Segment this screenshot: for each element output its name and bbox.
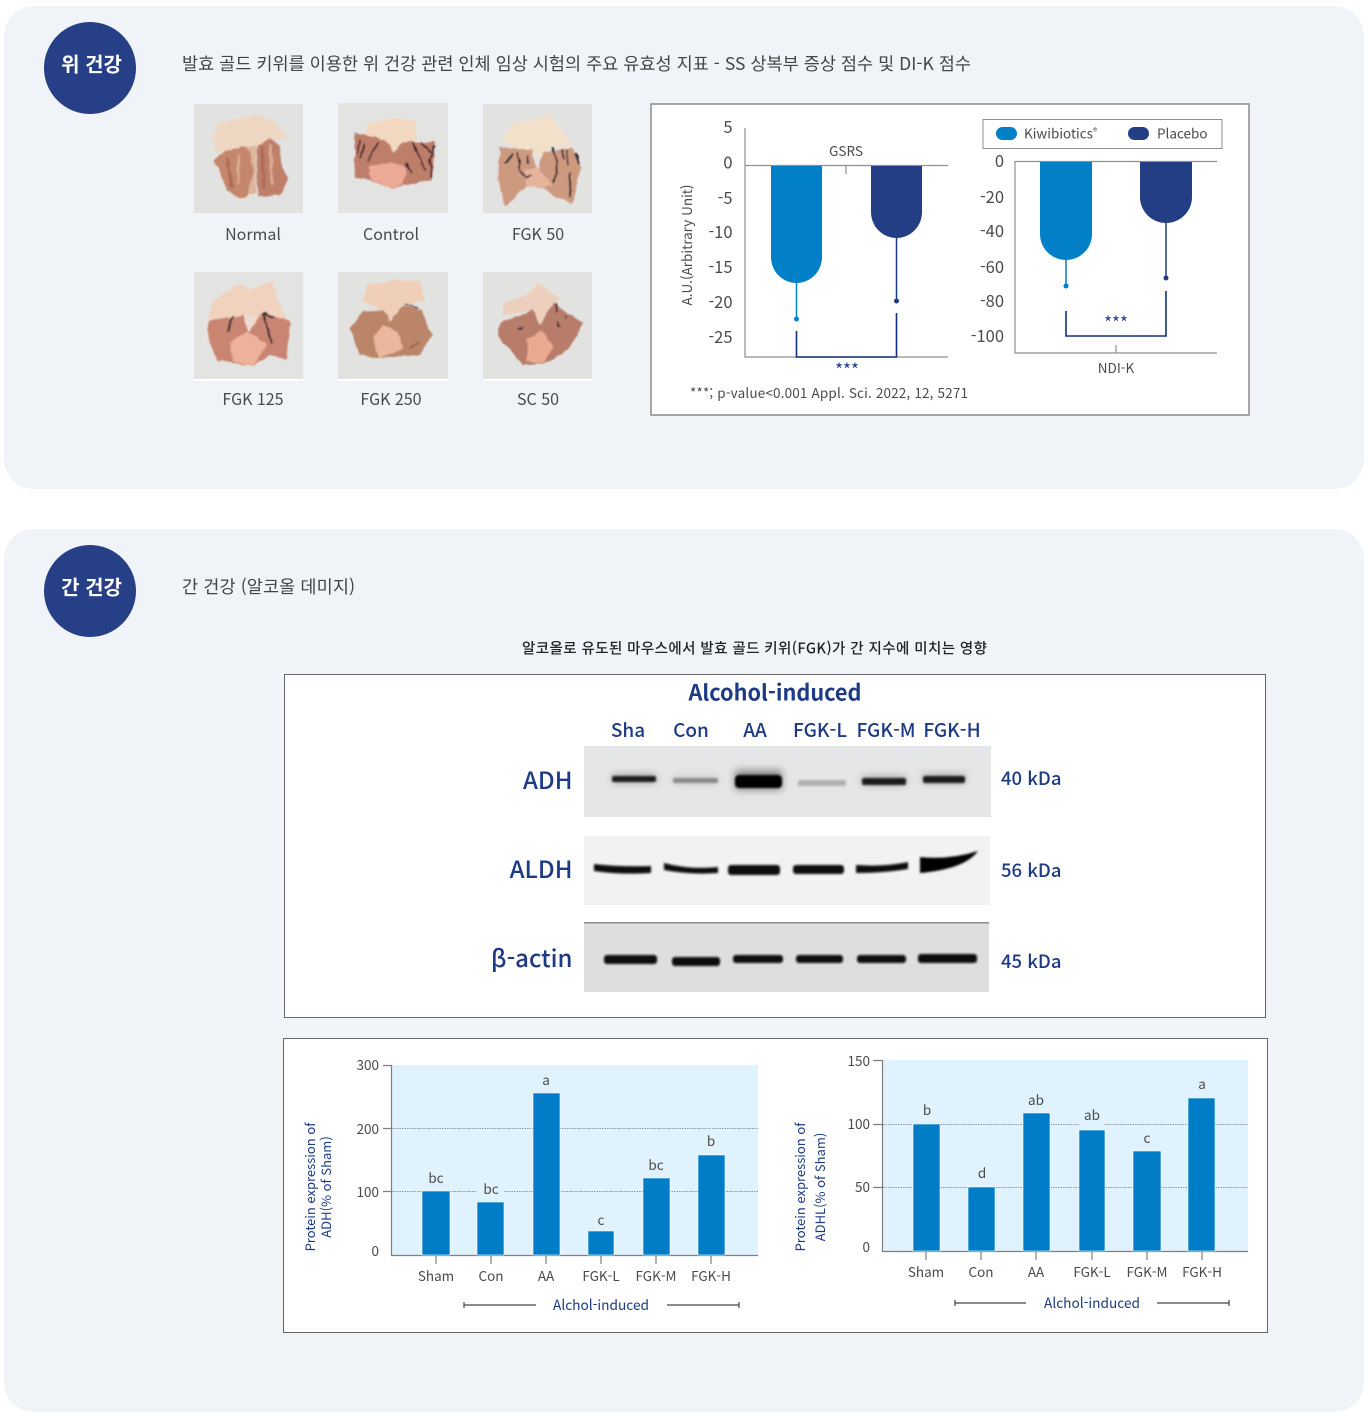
blot row: beta-actin: β-actin <box>491 939 572 974</box>
GSRS y labels: -20 <box>708 289 732 313</box>
ADH y labels: 100 <box>357 1181 379 1201</box>
GSRS y labels: -25 <box>708 324 732 348</box>
ADHL category labels: AA <box>1028 1261 1045 1281</box>
blot row: beta-actin <box>491 922 1061 992</box>
ADHL y labels: 0 <box>862 1236 870 1256</box>
legend: Placebo <box>1157 122 1208 142</box>
GSRS y labels: -15 <box>708 254 732 278</box>
photo: FGK 50 <box>483 104 592 213</box>
photo captions: FGK 125 <box>222 386 284 410</box>
ADHL y labels: 100 <box>848 1113 870 1133</box>
GSRS bar: Placebo <box>871 166 922 304</box>
lane labels: FGK-H <box>923 716 981 743</box>
blot row: ADH: ADH <box>523 761 572 796</box>
ADHL category labels: Con <box>968 1261 994 1281</box>
NDI-K bar: Placebo <box>1140 162 1192 280</box>
ADH group bracket <box>464 1295 739 1315</box>
ADH significance letters: bc <box>483 1178 499 1198</box>
ADHL category labels: FGK-L <box>1073 1261 1111 1281</box>
NDI-K significance bracket: *** <box>1104 309 1128 334</box>
badge: 간 건강: 간 건강 <box>61 572 122 600</box>
ADHL significance letters: ab <box>1084 1104 1100 1124</box>
ADH category labels: Sham <box>418 1265 454 1285</box>
NDI-K y labels: -20 <box>980 184 1004 208</box>
NDI-K title: NDI-K <box>1098 357 1134 377</box>
lane labels: AA <box>743 716 767 743</box>
panel: liver health <box>4 529 1364 1412</box>
ADH category labels: FGK-L <box>582 1265 620 1285</box>
NDI-K bar: Kiwibiotics <box>1040 162 1092 288</box>
legend <box>983 120 1222 148</box>
NDI-K y labels: 0 <box>995 148 1004 172</box>
ADHL category labels <box>908 1261 1222 1281</box>
ADHL y axis title: Protein expression of <box>790 1122 809 1251</box>
NDI-K axis <box>1015 161 1217 353</box>
ADHL significance letters: a <box>1198 1073 1206 1093</box>
blot row: beta-actin: 45 kDa <box>1001 948 1061 974</box>
ADHL category labels: FGK-H <box>1182 1261 1222 1281</box>
GSRS y labels <box>708 114 732 348</box>
lane labels: Con <box>673 716 709 743</box>
GSRS significance bracket <box>796 313 896 381</box>
NDI-K y labels: -60 <box>980 254 1004 278</box>
panel: stomach health <box>4 6 1364 489</box>
GSRS y axis title: A.U.(Arbitrary Unit) <box>676 185 696 305</box>
photo captions <box>222 221 564 410</box>
ADH significance letters: bc <box>648 1154 664 1174</box>
chart: ADHL expression <box>790 1050 1248 1313</box>
chart: ADH expression: ADH(% of Sham) <box>316 1136 335 1238</box>
ADHL grid lines <box>883 1124 1248 1188</box>
photo captions: SC 50 <box>517 386 559 410</box>
ADH significance letters: bc <box>428 1167 444 1187</box>
blot row: ALDH: 56 kDa <box>1001 857 1061 883</box>
ADH category labels <box>418 1265 731 1285</box>
chart panel: GSRS and NDI-K <box>651 104 1249 415</box>
ADHL significance letters: ab <box>1028 1089 1044 1109</box>
photo: FGK 250 <box>338 272 448 381</box>
ADH significance letters: c <box>598 1209 605 1229</box>
blot row: ADH <box>523 746 1061 817</box>
photo: Control <box>338 103 448 213</box>
blot row: ADH: 40 kDa <box>1001 765 1061 791</box>
ADH group bracket: Alchol-induced <box>553 1295 649 1315</box>
ADHL y labels <box>848 1050 870 1256</box>
photo captions: Control <box>363 221 419 245</box>
ADHL group bracket <box>955 1293 1229 1313</box>
heading: stomach clinical trial: 발효 골드 키위를 이용한 위 건강 관련 인체 임상 시험의 주요 유효성 지표 - SS 상복부 증상 점수 및 DI-K 점수 <box>182 51 971 76</box>
bar charts panel <box>284 1038 1268 1332</box>
ADH y labels: 0 <box>372 1240 379 1260</box>
ADHL y labels: 150 <box>848 1050 870 1070</box>
GSRS y labels: 5 <box>723 114 732 138</box>
GSRS y labels: -5 <box>718 185 732 209</box>
photo: Normal <box>194 104 303 213</box>
ADH bars <box>422 1093 725 1255</box>
legend: ® <box>1093 124 1097 138</box>
NDI-K y labels <box>971 148 1004 347</box>
photo: FGK 125 <box>194 272 305 381</box>
photo captions: FGK 250 <box>360 386 422 410</box>
chart: ADH expression <box>300 1054 758 1315</box>
ADHL group bracket: Alchol-induced <box>1044 1293 1140 1313</box>
subheading: FGK effect: 알코올로 유도된 마우스에서 발효 골드 키위(FGK)가 간 지수에 미치는 영향 <box>522 638 987 658</box>
ADH y axis title: Protein expression of <box>300 1122 319 1251</box>
ADH category labels: AA <box>538 1265 555 1285</box>
ADHL significance letters: d <box>978 1162 986 1182</box>
ADHL plot background <box>883 1060 1248 1251</box>
ADHL category labels: FGK-M <box>1126 1261 1168 1281</box>
ADHL significance letters: b <box>923 1099 931 1119</box>
GSRS y labels: 0 <box>723 150 732 174</box>
GSRS significance bracket: *** <box>835 356 859 381</box>
badge: 간 건강 <box>44 545 136 637</box>
lane labels: Sha <box>611 716 645 743</box>
lane labels: FGK-L <box>793 716 847 743</box>
ADH category labels: FGK-H <box>691 1265 731 1285</box>
ADH axes <box>383 1066 758 1264</box>
blot title: Alcohol-induced <box>688 676 862 708</box>
ADH significance letters: a <box>542 1069 550 1089</box>
NDI-K y labels: -100 <box>971 323 1004 347</box>
lane labels: FGK-M <box>856 716 916 743</box>
legend: Kiwibiotics <box>1024 122 1093 142</box>
ADHL significance letters: c <box>1144 1127 1151 1147</box>
ADH category labels: FGK-M <box>636 1265 676 1285</box>
ADHL bars <box>913 1098 1215 1251</box>
ADH y labels <box>357 1054 379 1260</box>
lane labels <box>611 716 981 743</box>
ADHL significance letters <box>923 1073 1206 1182</box>
ADH significance letters <box>428 1069 715 1229</box>
ADH y labels: 200 <box>357 1118 379 1138</box>
chart: ADHL expression: ADHL(% of Sham) <box>810 1133 829 1241</box>
NDI-K y labels: -80 <box>980 288 1004 312</box>
badge: 위 건강: 위 건강 <box>61 48 122 78</box>
GSRS title: GSRS <box>829 140 863 160</box>
photo captions: Normal <box>225 221 281 245</box>
ADHL axes <box>873 1060 1248 1260</box>
western blot panel <box>284 674 1266 1018</box>
chart: NDI-K <box>971 148 1217 377</box>
photo: SC 50 <box>483 272 593 381</box>
NDI-K significance bracket <box>1066 291 1166 336</box>
blot row: ALDH: ALDH <box>510 850 572 885</box>
ADH category labels: Con <box>478 1265 504 1285</box>
photo captions: FGK 50 <box>512 221 564 245</box>
heading: liver health: 간 건강 (알코올 데미지) <box>182 574 355 599</box>
blot row: ALDH <box>510 836 1061 905</box>
badge: 위 건강 <box>44 22 136 114</box>
GSRS y labels: -10 <box>708 219 732 243</box>
ADH plot background <box>392 1065 758 1255</box>
ADHL y labels: 50 <box>855 1176 870 1196</box>
NDI-K y labels: -40 <box>980 218 1004 242</box>
GSRS axis <box>745 128 948 357</box>
ADHL category labels: Sham <box>908 1261 944 1281</box>
footnote: ***; p-value<0.001 Appl. Sci. 2022, 12, 5271 <box>690 382 968 402</box>
ADH significance letters: b <box>707 1130 715 1150</box>
ADH grid lines <box>392 1128 758 1192</box>
ADH y labels: 300 <box>357 1054 379 1074</box>
GSRS bar: Kiwibiotics <box>771 166 822 322</box>
chart: GSRS <box>676 114 948 381</box>
